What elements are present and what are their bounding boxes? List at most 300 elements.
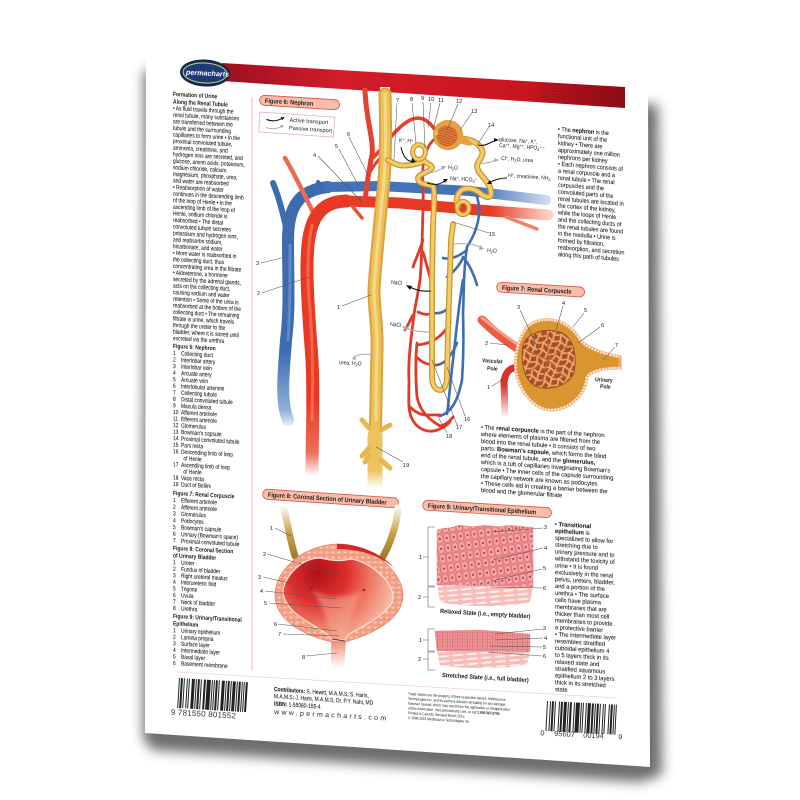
text block: nephron description: nephrons per kidney <box>558 155 608 165</box>
text block: formation of urine: renal tubule, many substances <box>173 112 239 123</box>
transport arrows: figure 6 <box>352 138 507 360</box>
legend list: figure 6 nephron: of Henle <box>183 456 202 464</box>
chemical labels: figure 6: + <box>534 139 537 143</box>
figure 9: stretched epithelium: 5 <box>543 645 546 651</box>
interlobar and arcuate veins <box>273 182 546 420</box>
heading pill: figure 8: Figure 8: Coronal Section of Urinary Bladder <box>268 492 387 507</box>
text block: transitional epithelium description: specialized to allow for <box>555 536 613 545</box>
leader lines and numbers: figure 7: 1 <box>487 385 490 391</box>
legend list: figure 7 renal corpuscle: Glomerulus <box>181 512 206 520</box>
figure 9: relaxed epithelium <box>418 525 547 607</box>
legend list: figure 8 urinary bladder: of Urinary Bladder <box>173 553 217 562</box>
legend list: figure 6 nephron: Collecting tubule <box>181 390 217 399</box>
text block: renal corpuscle description: • These cells aid in creating a barrier between the <box>481 481 608 495</box>
bladder cavity <box>283 558 393 640</box>
barcode: UPC <box>540 716 623 741</box>
legend list: figure 6 nephron: Descending limb of loop <box>181 449 233 459</box>
fine print: of this information. Visit permacharts.com, or call 1.800.567.6700. <box>408 706 500 716</box>
heading pill: figure 6 <box>259 95 340 110</box>
text block: formation of urine <box>173 92 246 346</box>
chemical labels: figure 6: , Mg <box>509 144 520 151</box>
legend list: figure 6 nephron: Vasa recta <box>181 475 205 483</box>
legend: transport arrows: Passive transport <box>289 126 333 135</box>
legend list: figure 6 nephron: 5 <box>173 377 176 384</box>
leader lines and numbers: figure 8: 3 <box>258 575 261 581</box>
text block: transitional epithelium description: a protective barrier <box>555 625 603 634</box>
legend list: figure 9 epithelium: Basal layer <box>181 654 205 662</box>
leader lines and numbers: figure 6: 11 <box>438 98 444 104</box>
legend list: figure 6 nephron: 16 <box>173 449 178 456</box>
text block: formation of urine: hydrogen ions are secreted, and <box>173 152 243 162</box>
legend list: figure 6 nephron: Proximal convoluted tubule <box>181 436 239 446</box>
legend list: figure 7 renal corpuscle <box>173 491 239 548</box>
text block: formation of urine: glucose, amino acids, potassium, <box>173 158 245 169</box>
glomerulus <box>522 331 575 388</box>
text block: formation of urine: retention • Some of the urea is <box>173 296 239 307</box>
text block: transitional epithelium description: urethra • The surface <box>555 591 610 600</box>
leader lines and numbers: figure 8: 4 <box>260 589 263 595</box>
podocyte border <box>515 320 620 410</box>
legend list: figure 6 nephron: 8 <box>173 396 176 403</box>
leader lines and numbers: figure 7: 2 <box>485 341 488 347</box>
legend list: figure 6 nephron: 19 <box>173 482 178 489</box>
text block: formation of urine: ammonia, creatinine, and <box>173 145 228 155</box>
leader lines and numbers: figure 6: 18 <box>446 434 452 440</box>
legend list: figure 9 epithelium: Urinary epithelium <box>181 628 221 637</box>
legend list: figure 6 nephron: Collecting duct <box>181 351 213 359</box>
Bowman's capsule and glomerulus <box>434 120 474 150</box>
legend list: figure 8 urinary bladder: Ureter <box>181 560 195 568</box>
figure 8: urinary bladder diagram <box>275 505 403 668</box>
bladder wall <box>275 544 403 642</box>
legend list: figure 9 epithelium: Basement membrane <box>181 661 228 670</box>
chemical labels: figure 6: NaCl <box>391 280 402 287</box>
heading pill: figure 6: Figure 6: Nephron <box>265 98 314 108</box>
figure 9: stretched epithelium: 2 <box>418 657 421 663</box>
legend list: figure 6 nephron: Distal convoluted tubule <box>181 397 233 406</box>
chemical labels: figure 6: , HCO <box>458 176 473 184</box>
chemical labels: figure 6: , H <box>404 138 411 145</box>
text block: nephron description: the renal tubules are found <box>558 224 623 236</box>
legend list: figure 7 renal corpuscle: Figure 7: Renal Corpuscle <box>173 491 234 501</box>
fine print: Trade names are the property of their respective names. Meditsource <box>408 692 505 702</box>
legend list: figure 7 renal corpuscle: 1 <box>173 498 176 504</box>
heading pill: figure 7: Figure 7: Renal Corpuscle <box>502 285 572 296</box>
leader lines and numbers: figure 8: 7 <box>278 632 281 638</box>
chemical labels: figure 6: NaCl <box>390 322 401 329</box>
legend list: figure 6 nephron: Arcuate artery <box>181 371 212 379</box>
leader lines and numbers: figure 8: 1 <box>270 526 273 532</box>
figure 9: stretched epithelium: 4 <box>544 636 547 642</box>
urethra <box>331 640 346 668</box>
labels: vascular and urinary pole <box>482 358 613 391</box>
legend list: figure 8 urinary bladder: 3 <box>173 573 176 580</box>
text block: formation of urine: acts on the collecting duct, <box>173 283 231 293</box>
text block: renal corpuscle description: capsule • The inner cells of the capsule surrounding <box>481 467 613 482</box>
legend list: figure 6 nephron: Pars recta <box>181 443 204 451</box>
text block: transitional epithelium description: membranes that are <box>555 604 607 614</box>
text block: nephron description: kidney • There are <box>558 141 602 151</box>
legend list: figure 6 nephron: 12 <box>173 423 178 430</box>
logo: permacharts: permacharts <box>185 67 229 79</box>
labels: vascular and urinary pole: Pole <box>600 384 611 391</box>
text block: transitional epithelium description: cells have plasma <box>555 598 602 607</box>
leader lines and numbers: figure 6: 9 <box>421 96 424 102</box>
leader lines and numbers: figure 8: 8 <box>302 655 305 661</box>
legend list: figure 7 renal corpuscle: Afferent arteriole <box>181 505 217 513</box>
text block: renal corpuscle description: which is a tuft of capillaries invaginating Bowman's <box>480 460 610 475</box>
trigone folds <box>312 590 362 638</box>
figure 9: relaxed epithelium: 1 <box>419 555 422 561</box>
legend list: figure 9 epithelium: 4 <box>173 647 176 654</box>
text block: transitional epithelium description: resembles stratified <box>555 639 605 648</box>
text block: transitional epithelium description: • Transitional <box>555 522 591 530</box>
leader lines and numbers: figure 7: 5 <box>584 308 587 314</box>
legend list: figure 9 epithelium: Surface layer <box>181 641 210 650</box>
text block: renal corpuscle description: blood into the renal tubule • It consists of two <box>481 439 596 453</box>
text block: formation of urine: • Reabsorption of water <box>173 185 224 194</box>
heading pill: figure 8 <box>262 489 399 508</box>
chemical labels: figure 6 <box>339 136 551 368</box>
text block: nephron description: while the loops of Henle <box>557 210 616 221</box>
legend list: figure 8 urinary bladder: Right ureteral meatus <box>181 573 228 583</box>
text block: formation of urine: causing sodium and water <box>173 290 230 300</box>
chemical labels: figure 6: glucose, Na <box>499 137 526 145</box>
legend list: figure 6 nephron: Afferent arteriole <box>181 410 217 419</box>
logo: permacharts <box>179 58 231 88</box>
contributors and ISBN: Contributors: S. Hewitt, M.A.M.S; S. Haris, <box>274 687 369 700</box>
chemical labels: figure 6: ++ <box>519 144 525 148</box>
arterioles <box>482 318 524 418</box>
header band <box>222 63 625 108</box>
text block: nephron description: a renal corpuscle and a <box>558 169 616 179</box>
legend: transport arrows: Active transport <box>289 118 329 126</box>
legend list: figure 6 nephron <box>173 344 241 492</box>
legend list: figure 8 urinary bladder: Trigone <box>181 586 197 594</box>
leader lines and numbers: figure 6: 10 <box>428 97 434 103</box>
leader lines and numbers: figure 7 <box>485 301 618 391</box>
text block: transitional epithelium description: thick in its stretched <box>555 680 606 689</box>
legend list: figure 6 nephron: 4 <box>173 370 176 377</box>
barcode: UPC: 9 <box>618 732 623 741</box>
legend list: figure 6 nephron: 10 <box>173 410 178 416</box>
legend list: figure 9 epithelium: 5 <box>173 654 176 661</box>
text block: formation of urine: reabsorbed at the bottom of the <box>173 303 241 313</box>
figure 9: relaxed epithelium: 2 <box>418 595 421 601</box>
text block: transitional epithelium description: thicker than most cell <box>555 611 609 621</box>
legend list: figure 6 nephron: Interlobular arteriole <box>181 384 224 393</box>
legend list: figure 6 nephron: 17 <box>173 462 178 469</box>
leader lines and numbers: figure 6: 15 <box>489 232 495 238</box>
caption: relaxed state: Relaxed State (i.e., empty bladder) <box>440 609 531 620</box>
figure 9: stretched epithelium: 6 <box>543 654 546 660</box>
figure 6: nephron diagram <box>273 90 548 486</box>
chemical labels: figure 6: , H <box>508 156 515 163</box>
figure 9: relaxed epithelium: 3 <box>544 525 547 531</box>
legend list: figure 6 nephron: 3 <box>173 364 176 370</box>
legend list: figure 7 renal corpuscle: 4 <box>173 518 176 525</box>
text block: nephron description: reabsorption, and secretion <box>558 245 624 257</box>
leader lines and numbers: figure 6: 3 <box>256 261 259 267</box>
text block: formation of urine: • As fluid travels through the <box>173 106 233 116</box>
chemical labels: figure 6: H <box>508 173 512 179</box>
legend list: figure 7 renal corpuscle: Bowman's capsule <box>181 525 221 534</box>
legend list: figure 7 renal corpuscle: 2 <box>173 504 176 511</box>
legend list: figure 9 epithelium: Figure 9: Urinary/Transitional <box>173 614 242 624</box>
legend list: figure 7 renal corpuscle: 5 <box>173 525 176 531</box>
chemical labels: figure 6: , creatinine, NH <box>514 173 549 182</box>
chemical labels: figure 6: , <box>536 139 538 146</box>
text block: formation of urine: potassium and hydrogen ions, <box>173 231 238 241</box>
text block: nephron description: functional unit of the <box>558 134 607 144</box>
chemical labels: figure 6: H <box>448 165 452 171</box>
text block: nephron description: formed by filtration, <box>558 238 605 248</box>
ureters <box>283 505 398 560</box>
chemical labels: figure 6: + <box>456 176 460 180</box>
leader lines and numbers: figure 6: 7 <box>396 98 399 104</box>
fine print: Printed in Canada. Revised March 2012. <box>408 711 465 719</box>
text block: transitional epithelium description: relaxed state and <box>555 660 599 668</box>
legend list: figure 9 epithelium: 1 <box>173 628 176 635</box>
fine print: Technologies Inc. and its partners disclaim all liability for any damage, <box>408 697 506 707</box>
leader lines and numbers: figure 6: 19 <box>403 463 409 469</box>
leader lines and numbers: figure 7: 3 <box>517 305 520 311</box>
contributors and ISBN: ISBN: 1-55080-155-4 <box>274 701 321 711</box>
legend list: figure 6 nephron: 14 <box>173 436 178 443</box>
legend list: figure 6 nephron: 18 <box>173 475 178 482</box>
text block: nephron description: and the collecting ducts of <box>558 217 622 229</box>
barcode: UPC: 0 <box>540 728 545 737</box>
leader lines and numbers: figure 6: 14 <box>488 123 494 129</box>
chemical labels: figure 6: O <box>493 248 497 255</box>
leader lines and numbers: figure 6: 2 <box>257 291 260 297</box>
chemical labels: figure 6: − − <box>539 145 546 150</box>
legend list: figure 6 nephron: Glomerulus <box>181 423 206 431</box>
heading pill: figure 9 <box>422 500 552 518</box>
legend list: figure 9 epithelium: Lamina propria <box>181 635 214 643</box>
chemical labels: figure 6: 2 <box>355 362 358 368</box>
text block: formation of urine: tubule and the surrounding <box>173 125 231 135</box>
text block: nephron description: renal tubules are located in <box>558 196 624 208</box>
legend list: figure 9 epithelium <box>173 614 242 671</box>
sheet drop shadow <box>143 70 662 782</box>
chemical labels: figure 6: , HPO <box>523 145 538 152</box>
leader lines and numbers: figure 8: 5 <box>264 601 267 607</box>
text block: formation of urine: concentrating urea in the filtrate <box>173 263 241 274</box>
legend list: figure 8 urinary bladder: 2 <box>173 566 176 573</box>
figure 9: relaxed epithelium: 6 <box>543 586 546 592</box>
leader lines and numbers: figure 6: 13 <box>471 109 477 115</box>
legend list: figure 6 nephron: Ascending limb of loop <box>181 462 230 472</box>
text block: formation of urine: Along the Renal Tubule <box>173 99 228 109</box>
labels: vascular and urinary pole: Vascular <box>482 358 503 366</box>
fine print: © 1996-2021 Meditsource Technologies Inc. <box>408 716 470 724</box>
text block: formation of urine: • More water is reabsorbed in <box>173 250 236 260</box>
heading pill: figure 9: Figure 9: Urinary/Transitional Epithelium <box>428 503 536 516</box>
text block: formation of urine: through the ureter to the <box>173 323 225 332</box>
chemical labels: figure 6: Ca <box>499 143 506 150</box>
labels: vascular and urinary pole: Pole <box>487 366 498 373</box>
text block: formation of urine: Formation of Urine <box>173 92 217 101</box>
chemical labels: figure 6: K <box>399 138 403 144</box>
divider: left column <box>177 97 617 698</box>
text block: formation of urine: • Aldosterone, a hormone <box>173 270 228 280</box>
leader lines and numbers: figure 8 <box>258 526 345 661</box>
text block: renal corpuscle description: where elements of plasma are filtered from the <box>480 432 601 446</box>
text block: formation of urine: excreted via the urethra <box>173 336 225 345</box>
text block: transitional epithelium description: stratified squamous <box>555 666 605 676</box>
text block: nephron description: • The nephron is the <box>558 127 609 137</box>
text block: renal corpuscle description: • The renal corpuscle is the part of the nephron <box>481 425 605 439</box>
text block: nephron description: approximately one million <box>558 148 620 159</box>
legend list: figure 7 renal corpuscle: Urinary (Bowman's space) <box>181 532 238 542</box>
text block: formation of urine: ascending limb of the loop of <box>173 204 235 214</box>
legend list: figure 6 nephron: 11 <box>173 416 178 423</box>
chemical labels: figure 6: + <box>411 138 414 143</box>
leader lines and numbers: figure 6 <box>256 96 495 469</box>
figure 7: renal corpuscle diagram <box>482 318 620 418</box>
chemical labels: figure 6: , K <box>527 139 534 146</box>
legend list: figure 8 urinary bladder: 7 <box>173 599 176 606</box>
text block: nephron description: convoluted parts of the <box>558 189 613 200</box>
legend list: figure 6 nephron: Bowman's capsule <box>181 430 221 439</box>
legend list: figure 7 renal corpuscle: Podocytes <box>181 518 204 526</box>
chemical labels: figure 6: 3 <box>548 177 551 182</box>
interlobular and afferent arterioles <box>365 90 437 200</box>
leader lines and numbers: figure 7: 7 <box>615 343 618 349</box>
chemical labels: figure 6: + <box>526 138 529 143</box>
text block: nephron description: in the medulla • Urine is <box>558 231 616 242</box>
legend list: figure 6 nephron: 2 <box>173 357 176 364</box>
legend list: figure 8 urinary bladder <box>173 546 234 616</box>
legend list: figure 8 urinary bladder: 1 <box>173 560 176 567</box>
chemical labels: figure 6: ++ <box>505 143 511 147</box>
fine print: however caused, which may result from the application or misapplication <box>408 701 510 712</box>
text block: transitional epithelium description: to 5 layers thick in its <box>555 653 609 662</box>
text block: formation of urine: filtrate is urine, which travels <box>173 316 234 326</box>
legend list: figure 6 nephron: Macula densa <box>181 403 212 412</box>
legend list: figure 9 epithelium: Epithelium <box>173 621 198 629</box>
legend list: figure 6 nephron: Efferent arteriole <box>181 417 217 425</box>
text block: formation of urine: magnesium, phosphate, urea, <box>173 171 238 182</box>
chemical labels: figure 6: H <box>487 248 491 254</box>
chemical labels: figure 6: O <box>454 165 458 172</box>
legend list: figure 8 urinary bladder: Figure 8: Coronal Section <box>173 546 234 556</box>
legend list: figure 6 nephron: Figure 6: Nephron <box>173 344 216 353</box>
chemical labels: figure 6: Cl <box>501 156 506 162</box>
text block: formation of urine: proximal convoluted tubule, <box>173 139 233 149</box>
caption: stretched state: Stretched State (i.e., full bladder) <box>442 673 529 684</box>
heading pill: figure 7 <box>496 282 585 297</box>
legend list: figure 6 nephron: 15 <box>173 442 178 449</box>
figure 9: stretched epithelium <box>418 626 547 670</box>
website: www.permacharts.com <box>273 709 389 723</box>
text block: renal corpuscle description: blood and the glomerular filtrate <box>481 488 563 499</box>
fine print <box>408 692 511 726</box>
legend list: figure 8 urinary bladder: 6 <box>173 593 176 599</box>
text block: transitional epithelium description: cuboidal epithelium 4 <box>555 646 610 655</box>
legend list: figure 6 nephron: Interlobar vein <box>181 364 212 372</box>
collecting duct <box>362 94 390 486</box>
contributors and ISBN: M.A.M.S; J. Haris, M.A.M.S; Dr. P.Y. Nahi, MD <box>274 694 373 707</box>
barcode: UPC: 00194 <box>583 730 604 741</box>
text block: renal corpuscle description: the capillary network are known as podocytes <box>481 474 598 488</box>
chemical labels: figure 6: O <box>357 361 362 368</box>
renal tubule with loop of Henle <box>388 138 491 390</box>
figure 9: relaxed epithelium: 5 <box>543 566 546 572</box>
text block: formation of urine: the collecting duct, thus <box>173 257 224 266</box>
text block: formation of urine: collecting duct • The remaining <box>173 309 239 320</box>
text block: renal corpuscle description <box>480 425 615 503</box>
text block: formation of urine: bicarbonate, and water <box>173 244 223 253</box>
chemical labels: figure 6: 2 <box>514 158 517 163</box>
text block: formation of urine: capillaries to form urine • In the <box>173 132 240 142</box>
legend list: figure 7 renal corpuscle: Proximal convoluted tubule <box>181 539 239 548</box>
figure 9: relaxed epithelium: 4 <box>544 546 547 552</box>
legend list: figure 6 nephron: Interlobar artery <box>181 358 216 366</box>
leader lines and numbers: figure 8: 6 <box>274 622 277 628</box>
leader lines and numbers: figure 6: 1 <box>337 305 340 311</box>
text block: formation of urine: bladder, where it is stored until <box>173 329 239 339</box>
text block: formation of urine: of the loop of Henle • In the <box>173 198 232 208</box>
legend list: figure 8 urinary bladder: Interureteric fold <box>181 580 216 588</box>
capsule <box>515 320 620 410</box>
legend list: figure 9 epithelium: 3 <box>173 641 176 648</box>
legend list: figure 7 renal corpuscle: 7 <box>173 538 176 545</box>
legend list: figure 8 urinary bladder: 4 <box>173 579 176 586</box>
legend list: figure 8 urinary bladder: Urethra <box>181 606 198 614</box>
legend list: figure 7 renal corpuscle: 6 <box>173 531 176 538</box>
chemical labels: figure 6: urea, H <box>339 360 356 367</box>
legend list: figure 6 nephron: 6 <box>173 383 176 390</box>
chemical labels: figure 6: + <box>402 138 406 142</box>
legend list: figure 8 urinary bladder: Fundus of bladder <box>181 567 220 576</box>
legend list: figure 6 nephron: Duct of Bellini <box>181 482 211 490</box>
chemical labels: figure 6: 2 <box>451 166 455 172</box>
text block: transitional epithelium description: membranes to provide <box>555 618 613 628</box>
text block: transitional epithelium description: and a portion of the <box>555 584 605 593</box>
legend list: figure 8 urinary bladder: 5 <box>173 586 176 593</box>
barcode: UPC: 95607 <box>554 729 575 739</box>
legend list: figure 8 urinary bladder: Uvula <box>181 593 194 600</box>
chemical labels: figure 6: Na <box>450 176 457 183</box>
text block: transitional epithelium description: urine • It is found <box>555 563 598 572</box>
leader lines and numbers: figure 6: 12 <box>456 99 462 105</box>
legend list: figure 7 renal corpuscle: 3 <box>173 511 176 518</box>
text block: formation of urine: secreted by the adrenal glands, <box>173 277 241 287</box>
text block: nephron description: along this path of tubules <box>558 252 619 263</box>
labels: vascular and urinary pole: Urinary <box>595 377 613 384</box>
leader lines and numbers: figure 7: 4 <box>562 301 565 307</box>
text block: formation of urine: are transferred between the <box>173 119 233 129</box>
text block: formation of urine: and water are reabsorbed <box>173 178 229 188</box>
text block: formation of urine: reabsorbed • The distal <box>173 217 223 227</box>
leader lines and numbers: figure 7: 6 <box>601 323 604 329</box>
serosa top <box>337 544 394 568</box>
chemical labels: figure 6: 4 <box>537 147 540 152</box>
legend list: figure 6 nephron: of Henle <box>183 469 202 477</box>
chemical labels: figure 6: + <box>512 173 515 177</box>
legend list: figure 7 renal corpuscle: Efferent arteriole <box>181 498 217 507</box>
text block: formation of urine: convoluted tubule secretes <box>173 224 231 234</box>
text block: transitional epithelium description: urinary pressure and to <box>555 549 615 559</box>
legend list: figure 8 urinary bladder: 8 <box>173 606 176 612</box>
text block: formation of urine: sodium chloride, calcium, <box>173 165 228 175</box>
legend list: figure 9 epithelium: Intermediate layer <box>181 648 220 657</box>
vasa recta <box>405 138 479 431</box>
barcode: ISBN <box>171 693 247 721</box>
leader lines and numbers: figure 6: 16 <box>464 417 470 423</box>
